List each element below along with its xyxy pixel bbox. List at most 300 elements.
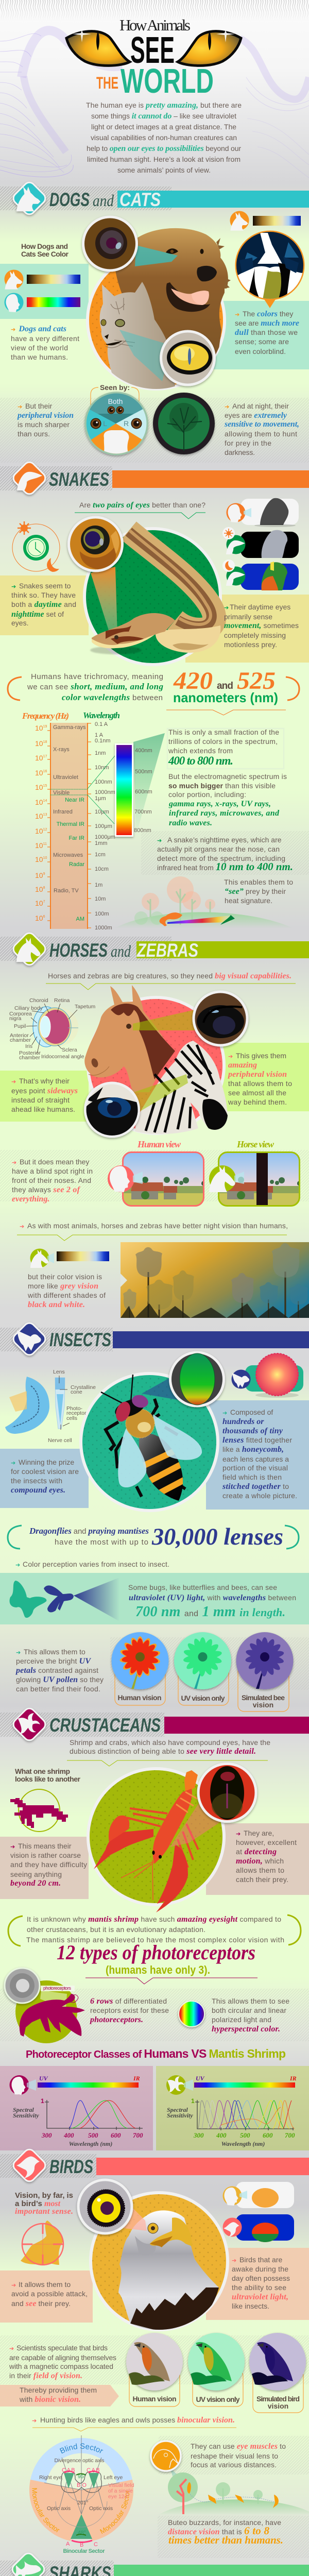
hatched strip bbox=[0, 2335, 309, 2384]
callout: 30000 lenses: Dragonflies and praying mantises bbox=[29, 1526, 149, 1536]
text: daytime eyes sense movement: Their daytime eyes bbox=[230, 603, 290, 611]
text: night vision: As with most animals, horses and zebras have better night vision than humans, bbox=[27, 1222, 288, 1230]
diagram: bird visual field: CAB bbox=[62, 2467, 76, 2473]
pictures: robin in simulated bird vision: Simulated bird bbox=[256, 2395, 300, 2403]
text: detecting motion bbox=[236, 1829, 297, 1884]
number: 420 and 525: 525 bbox=[237, 667, 276, 694]
bee bbox=[101, 1375, 202, 1501]
frequency labels: 17 bbox=[43, 755, 47, 758]
wavelength labels: 1m bbox=[95, 882, 102, 888]
text: honeycomb lenses: field which is then bbox=[222, 1473, 282, 1481]
frequency labels: 10 bbox=[35, 769, 43, 777]
column: Infrared bbox=[53, 809, 73, 815]
panel: mantis shrimp photoreceptor chart: 400 bbox=[216, 2131, 227, 2139]
text: blind spot: front of their noses. And bbox=[12, 1176, 91, 1184]
icon: dog diamond bbox=[11, 180, 47, 216]
column: Gamma-rays bbox=[53, 724, 86, 731]
text: grey vision: but their color vision is bbox=[28, 1273, 102, 1281]
number: 420 and 525: and bbox=[217, 681, 233, 691]
text: peripheral vision: peripheral vision bbox=[16, 411, 74, 420]
text: coarse vision: and they have difficulty bbox=[10, 1860, 87, 1869]
column: Microwaves bbox=[53, 852, 83, 858]
diagram: horse eye anatomy: Sclera bbox=[62, 1047, 77, 1053]
icon: lobster eye bbox=[198, 1764, 256, 1822]
text: honeycomb lenses: hundreds or bbox=[222, 1417, 264, 1426]
number: 420 and 525 bbox=[173, 667, 278, 705]
icon: bird diamond bbox=[11, 2147, 47, 2183]
visible spectrum close-up bbox=[88, 733, 165, 836]
human egg view bbox=[222, 2182, 294, 2208]
frequency labels: 6 bbox=[43, 915, 45, 919]
callout: 12 types of photoreceptors bbox=[8, 1915, 301, 1984]
diagram: ommatidium: cells bbox=[66, 1415, 77, 1421]
section banner: snakes bbox=[0, 460, 309, 496]
picture: simulated bee vision flower: vision bbox=[253, 1701, 273, 1709]
panel: snake nighttime eyes: actually pit organs near the nose, can bbox=[157, 845, 280, 853]
callout: trichromacy bbox=[8, 667, 299, 715]
section banner: insects bbox=[0, 1321, 309, 1357]
text: dogs and cats view: have a very different bbox=[11, 334, 79, 343]
diagram: horse eye anatomy: nigra bbox=[9, 1015, 22, 1022]
diagram: bird visual field: BO bbox=[77, 2482, 88, 2488]
panel: snake nighttime eyes bbox=[141, 831, 309, 875]
wavelength labels: 1mm bbox=[95, 840, 107, 846]
diagram: ommatidium: receptor bbox=[66, 1410, 87, 1416]
visible spectrum close-up: 500nm bbox=[135, 769, 152, 775]
heading: frequency: Frequency (Hz) bbox=[22, 711, 69, 721]
chart: field of view: R bbox=[124, 419, 129, 428]
diagram: bird visual field: C bbox=[94, 2541, 98, 2548]
diagram: compound eye section bbox=[5, 1377, 49, 1434]
text: peripheral vision: than ours. bbox=[18, 430, 50, 438]
picture: human view bbox=[108, 1139, 207, 1207]
frequency labels: 10 bbox=[35, 812, 43, 820]
visible spectrum close-up: 600nm bbox=[135, 789, 152, 795]
side bands bbox=[0, 1823, 309, 1899]
panel: mantis shrimp photoreceptor chart: 600 bbox=[263, 2131, 273, 2139]
text: ultraviolet light: day often possess bbox=[232, 2274, 290, 2282]
icon: shark diamond bbox=[10, 2551, 46, 2576]
icon: rabbit in crosshair bbox=[21, 2221, 63, 2265]
pictures: robin in simulated bird vision bbox=[249, 2333, 306, 2413]
text: night movement: sensitive to movement, bbox=[224, 420, 299, 429]
text: blind spot: ➔ bbox=[12, 1159, 16, 1166]
panel: uv light band bbox=[0, 1573, 309, 1624]
diagram: bird visual field: Right eye bbox=[39, 2475, 62, 2481]
diagram: ommatidium: Photo- bbox=[66, 1405, 82, 1412]
chart: field of view bbox=[83, 392, 149, 457]
text: blind spot: But it does mean they bbox=[20, 1158, 89, 1166]
text: dogs and cats view: view of the world bbox=[11, 344, 68, 352]
chart: human colour spectrum bbox=[4, 293, 80, 312]
text: visible fraction of spectrum: But the electromagnetic spectrum is bbox=[168, 772, 287, 781]
section banner: crustaceans bbox=[0, 1706, 309, 1742]
frequency labels: 10 bbox=[35, 739, 43, 748]
intro paragraph: visual capabilities of non-human creatures can bbox=[91, 133, 237, 142]
text: magnetic compass: ➔ bbox=[9, 2345, 14, 2352]
panel: snakes bbox=[0, 498, 309, 665]
question: Are two pairs of eyes better than one? bbox=[79, 501, 205, 510]
text: buzzards: times better than humans. bbox=[168, 2534, 283, 2546]
text: six rows: photoreceptors. bbox=[89, 2015, 143, 2024]
text: avoid attack: ➔ bbox=[11, 2282, 16, 2289]
text: night movement: And at night, their bbox=[232, 402, 289, 410]
text: blind spot: they always see 2 of bbox=[12, 1185, 81, 1194]
diagram: horse eye anatomy: Posterior bbox=[19, 1050, 41, 1056]
diagram: bird visual field bbox=[29, 2435, 134, 2554]
text: daytime and nighttime eyes: eyes. bbox=[11, 619, 28, 627]
text: buzzards: distance vision that is 6 to 8 bbox=[168, 2524, 270, 2537]
panel: insects bbox=[0, 1352, 309, 1711]
heading: how dogs and cats see color bbox=[21, 242, 69, 258]
text: night movement: for prey in the bbox=[225, 439, 271, 447]
text: magnetic compass: with a magnetic compass located bbox=[9, 2362, 113, 2370]
wavelength labels: 1 A bbox=[95, 732, 104, 738]
panel: human photoreceptor chart: 300 bbox=[41, 2131, 52, 2139]
heading: how dogs and cats see color: How Dogs and bbox=[21, 242, 68, 250]
side bands bbox=[0, 2248, 309, 2323]
snake circle bbox=[84, 529, 220, 665]
number: 420 and 525: 420 bbox=[173, 667, 213, 694]
diagram: horse eye anatomy: Anterior bbox=[10, 1032, 29, 1039]
section banner: birds bbox=[0, 2147, 309, 2183]
heading: photoreceptor classes: Photoreceptor Classes of Humans VS Mantis Shrimp bbox=[26, 2047, 286, 2060]
zebra bbox=[134, 1041, 228, 1134]
callout: 30000 lenses bbox=[8, 1523, 299, 1550]
frequency labels: 10 bbox=[35, 899, 43, 907]
frequency labels: 15 bbox=[43, 784, 47, 788]
heading: horses and zebras: and bbox=[111, 942, 131, 960]
text: honeycomb lenses: like a honeycomb, bbox=[222, 1445, 284, 1454]
diagram: horse eye anatomy: Corporea bbox=[9, 1011, 32, 1017]
text: visible fraction of spectrum: color portion, including: bbox=[168, 790, 246, 799]
text: visible fraction of spectrum: radio waves. bbox=[169, 819, 212, 827]
text: six rows bbox=[89, 1997, 169, 2024]
text: visible fraction of spectrum: so much bigger than this visible bbox=[168, 782, 276, 790]
text: eye muscles bbox=[191, 2442, 286, 2469]
text: blind spot: everything. bbox=[12, 1195, 49, 1204]
panel: mantis shrimp photoreceptor chart: IR bbox=[289, 2075, 297, 2082]
diagram: bird visual field: Monocular Sector bbox=[100, 2490, 130, 2534]
heading: horses and zebras: HORSES bbox=[49, 940, 108, 961]
text: colours dull: sense; some are bbox=[235, 337, 289, 346]
bracket right bbox=[286, 677, 299, 700]
hatched strip bbox=[110, 1637, 309, 1690]
bee circle bbox=[81, 1374, 218, 1511]
picture: simulated bee vision flower bbox=[236, 1632, 294, 1711]
diagram: horse eye anatomy: Retina bbox=[54, 997, 70, 1004]
visible spectrum close-up: 700nm bbox=[134, 809, 152, 815]
diagram: horse eye anatomy: Ciliary body bbox=[14, 1005, 43, 1011]
human mouse view bbox=[227, 498, 299, 527]
icon: eagle eye bbox=[78, 2180, 132, 2233]
diagram: bird visual field: Left eye bbox=[104, 2475, 123, 2481]
diagram: bird visual field: Optic axis bbox=[47, 2505, 71, 2512]
hatched strip bbox=[158, 2436, 309, 2558]
wavelength labels: 0.1 A bbox=[95, 721, 108, 727]
callout: 12 types of photoreceptors: other crustaceans, but it is an evolutionary adaptation. bbox=[27, 1925, 205, 1934]
text: colours dull: The bbox=[243, 310, 257, 318]
text: daytime eyes sense movement: movement, sometimes bbox=[224, 621, 299, 630]
frequency labels: 10 bbox=[43, 856, 47, 860]
column: Thermal IR bbox=[57, 821, 84, 827]
frequency labels: 8 bbox=[43, 886, 45, 890]
text: ultraviolet light: the ability to see bbox=[232, 2283, 286, 2292]
callout: bionic vision bbox=[0, 2385, 119, 2406]
text: dogs and cats view: Dogs and cats bbox=[19, 325, 66, 333]
text: peripheral vision: way behind them. bbox=[228, 1098, 287, 1106]
picture: horse view: Horse view bbox=[236, 1139, 274, 1149]
diagram: bird visual field: of a single bbox=[108, 2488, 133, 2494]
diagram: horse eye anatomy: chamber bbox=[19, 1055, 40, 1061]
text: magnetic compass bbox=[9, 2344, 116, 2380]
wavelength labels: 1cm bbox=[95, 852, 106, 858]
text: binocular vision bbox=[32, 2416, 236, 2431]
frequency labels: 11 bbox=[43, 842, 47, 846]
text: night movement: eyes are extremely bbox=[225, 411, 287, 420]
intro: dubious distinction of being able to see very little detail. bbox=[70, 1747, 256, 1756]
section banner: horses and zebras bbox=[0, 931, 309, 967]
heading: snakes: SNAKES bbox=[49, 469, 109, 490]
text: six rows: receptors exist for these bbox=[90, 2006, 169, 2014]
panel: mantis shrimp photoreceptor chart: UV bbox=[196, 2075, 205, 2082]
column: Far IR bbox=[68, 835, 84, 841]
text: dogs and cats view: ➔ bbox=[11, 326, 15, 333]
panel: human photoreceptor chart: UV bbox=[39, 2075, 48, 2082]
icon: zebra eye bbox=[85, 1083, 139, 1139]
diagram: horse eye anatomy: Choroid bbox=[29, 997, 48, 1004]
wavelength labels: 10m bbox=[95, 896, 106, 902]
panel: snake nighttime eyes: ➔ bbox=[157, 837, 162, 844]
cat bbox=[100, 282, 175, 392]
text: eye muscles: They can use eye muscles to bbox=[191, 2442, 286, 2451]
heading: horses and zebras: ZEBRAS bbox=[136, 940, 198, 961]
wavelength labels: 100μm bbox=[95, 823, 112, 829]
text: magnetic compass: in their field of vision. bbox=[9, 2371, 82, 2380]
column: Ultraviolet bbox=[53, 774, 78, 781]
text: uv petals: glowing UV pollen so they bbox=[16, 1675, 104, 1684]
frequency labels: 10 bbox=[35, 754, 43, 762]
diagram: ommatidium: Crystalline bbox=[71, 1384, 96, 1391]
text: peripheral vision: amazing bbox=[228, 1061, 257, 1070]
heading: wavelength: Wavelength bbox=[83, 710, 120, 720]
bracket left bbox=[8, 677, 22, 700]
text: peripheral vision: ➔ bbox=[18, 403, 22, 410]
frequency labels: 10 bbox=[35, 855, 43, 863]
text: peripheral vision: But their bbox=[25, 402, 52, 410]
text: daytime and nighttime eyes bbox=[11, 582, 76, 627]
diagram: bird visual field: Visual field bbox=[108, 2482, 134, 2488]
panel: human photoreceptor chart: Sensitivity bbox=[13, 2112, 39, 2119]
heading: vision is most important: a bird’s most bbox=[15, 2199, 61, 2208]
picture: dog view of cat bbox=[235, 231, 304, 308]
intro paragraph: some animals’ points of view. bbox=[117, 166, 211, 174]
text: peripheral vision: is much sharper bbox=[18, 420, 70, 429]
text: sideways eyes: ➔ bbox=[11, 1078, 16, 1085]
cat eyes logo bbox=[66, 30, 241, 65]
diagram: horse eye anatomy: Iris bbox=[25, 1043, 32, 1049]
illustration: snake sensing heat bbox=[114, 876, 294, 928]
text: peripheral vision: This gives them bbox=[236, 1052, 286, 1060]
text: coarse vision: ➔ bbox=[10, 1843, 15, 1850]
text: coarse vision bbox=[10, 1842, 87, 1888]
heading: horses and zebras bbox=[49, 940, 198, 961]
icon: crustacean diamond bbox=[11, 1706, 47, 1742]
text: buzzards: Buteo buzzards, for instance, have bbox=[168, 2518, 281, 2527]
text: uv wavelengths: ultraviolet (UV) light, with wavelengths between bbox=[129, 1594, 296, 1602]
callout text: Humans have trichromacy, meaning bbox=[31, 672, 163, 681]
panel: compound lens bbox=[232, 1353, 303, 1398]
eagle circle bbox=[91, 2193, 228, 2334]
snake night mouse view bbox=[222, 560, 299, 590]
text: night vision: ➔ bbox=[20, 1223, 24, 1230]
text: blind spot bbox=[12, 1158, 93, 1204]
heading: crustaceans: CRUSTACEANS bbox=[49, 1715, 161, 1736]
text: avoid attack: and see their prey. bbox=[11, 2299, 71, 2308]
picture: horse view bbox=[209, 1139, 302, 1207]
text: colour perception: ➔ bbox=[15, 1562, 20, 1568]
text: grey vision bbox=[27, 1273, 106, 1309]
diagram: horse eye anatomy: Pupil bbox=[14, 1023, 26, 1029]
column: Radio, TV bbox=[54, 888, 79, 894]
column: AM bbox=[76, 916, 84, 922]
text: visible fraction of spectrum: 400 to 800 nm. bbox=[168, 754, 233, 767]
text: colour perception: Color perception varies from insect to insect. bbox=[23, 1560, 169, 1568]
text: night movement: allowing them to hunt bbox=[225, 430, 297, 438]
text: dogs and cats view: than we humans. bbox=[11, 353, 68, 361]
visible spectrum close-up: 400nm bbox=[135, 748, 152, 754]
diagram: bird visual field: 48° bbox=[78, 2530, 86, 2536]
title word SEE: SEE bbox=[130, 30, 175, 71]
diagram: bird visual field: Blind Sector bbox=[60, 2443, 103, 2453]
frequency labels: 7 bbox=[43, 900, 45, 904]
hatched strip bbox=[0, 1150, 309, 1201]
pictures: robin in human vision bbox=[126, 2333, 183, 2406]
visible spectrum close-up: 800nm bbox=[134, 827, 151, 834]
callout: 12 types of photoreceptors: The mantis shrimp are believed to have the most complex color vision with bbox=[26, 1936, 284, 1944]
text: heat signature: heat signature. bbox=[225, 896, 272, 905]
legend: dog colour bar top bbox=[230, 211, 301, 231]
diagram: bird visual field: eye 124° bbox=[108, 2494, 130, 2500]
intro bbox=[46, 972, 296, 990]
text: daytime and nighttime eyes: both a daytime and bbox=[11, 600, 76, 609]
panel: human photoreceptor chart: Spectral bbox=[13, 2106, 34, 2113]
text: binocular vision: ➔ bbox=[32, 2417, 37, 2424]
text: uv petals: can better find their food. bbox=[16, 1685, 100, 1693]
text: peripheral vision: see almost all the bbox=[228, 1089, 286, 1097]
text: night movement: darkness. bbox=[225, 448, 255, 456]
intro: Shrimp and crabs, which also have compound eyes, have the bbox=[70, 1738, 270, 1747]
column: Near IR bbox=[65, 797, 84, 803]
frequency labels: 12 bbox=[43, 828, 47, 832]
title bbox=[66, 16, 241, 100]
horse bbox=[84, 985, 175, 1092]
diagram: horse eye anatomy: Tapetum bbox=[75, 1004, 96, 1010]
pictures: robin in simulated bird vision: vision bbox=[268, 2402, 288, 2410]
heading: dogs and cats bbox=[49, 189, 161, 210]
icon: snake diamond bbox=[11, 460, 47, 496]
text: uv wavelengths bbox=[128, 1583, 296, 1620]
text: blind spot: have a blind spot right in bbox=[12, 1167, 93, 1175]
text: ultraviolet light: ultraviolet light, bbox=[232, 2293, 288, 2301]
text: colours dull: colors they bbox=[257, 310, 293, 318]
panel: mantis shrimp photoreceptor chart: Spectral bbox=[167, 2106, 188, 2113]
text: grey vision: black and white. bbox=[28, 1300, 85, 1309]
icon: rainbow circle bbox=[179, 2001, 204, 2027]
text: honeycomb lenses bbox=[222, 1408, 297, 1500]
heading: dogs and cats: CATS bbox=[119, 189, 161, 210]
icon: day and night cycle bbox=[12, 521, 60, 572]
text: honeycomb lenses: thousands of tiny bbox=[222, 1427, 283, 1435]
beam: uv vision bbox=[74, 1578, 119, 1621]
frequency labels: 19 bbox=[43, 725, 47, 728]
panel: horses and zebras bbox=[0, 972, 309, 1350]
text: daytime eyes sense movement: primarily sense bbox=[224, 613, 272, 621]
diagram: ommatidium: Nerve cell bbox=[48, 1437, 72, 1444]
diagram: bird visual field: A bbox=[66, 2541, 70, 2547]
text: colours dull: even colorblind. bbox=[235, 347, 286, 355]
frequency labels bbox=[35, 724, 47, 922]
text: uv wavelengths: Some bugs, like butterflies and bees, can see bbox=[128, 1583, 277, 1591]
diagram: bird visual field: 201° bbox=[77, 2500, 89, 2506]
frequency labels: 14 bbox=[43, 799, 47, 803]
text: dogs and cats view bbox=[11, 325, 79, 361]
diagram: ommatidium bbox=[48, 1369, 96, 1444]
wavelength labels bbox=[95, 721, 115, 931]
panel: mantis shrimp photoreceptor chart bbox=[156, 2066, 309, 2150]
text: colours dull: see are much more bbox=[235, 319, 299, 328]
wavelength labels: 0.1nm bbox=[95, 738, 111, 744]
text: compound eyes bbox=[11, 1458, 79, 1495]
text: honeycomb lenses: Composed of bbox=[230, 1408, 273, 1416]
picture: pixelated shrimp bbox=[10, 1789, 68, 1832]
text: polarized light: hyperspectral color. bbox=[212, 2025, 280, 2033]
intro paragraph: limited human sight. Here’s a look at vision from bbox=[87, 155, 241, 163]
icon: horse eye bbox=[194, 992, 247, 1045]
text: uv petals: ➔ bbox=[16, 1649, 21, 1656]
text: honeycomb lenses: stitched together to bbox=[222, 1482, 289, 1491]
callout: 30000 lenses: have the most with up to bbox=[55, 1538, 148, 1547]
diagram: ommatidium: cone bbox=[71, 1389, 82, 1395]
heading: shrimp view: looks like to another bbox=[15, 1775, 81, 1783]
heading: insects: INSECTS bbox=[49, 1329, 111, 1350]
intro paragraph: help to open our eyes to possibilities beyond our bbox=[87, 144, 241, 153]
chart: electromagnetic spectrum bbox=[22, 710, 165, 931]
picture: tulips in horse vision bbox=[121, 1242, 309, 1318]
panel: human photoreceptor chart: 700 bbox=[133, 2131, 143, 2139]
panel: snake nighttime eyes: A snake’s nighttime eyes, which are bbox=[167, 836, 282, 844]
panel: mantis shrimp photoreceptor chart: 300 bbox=[193, 2131, 204, 2139]
text: colours dull: ➔ bbox=[235, 311, 239, 318]
text: visible fraction of spectrum: infrared rays, microwaves, and bbox=[169, 809, 280, 818]
text: compound eyes: the insects with bbox=[11, 1477, 62, 1485]
text: compound eyes: Winning the prize bbox=[19, 1458, 74, 1466]
frequency labels: 10 bbox=[35, 783, 43, 791]
text: avoid attack: avoid a possible attack, bbox=[11, 2290, 88, 2298]
frequency labels: 9 bbox=[43, 872, 45, 876]
diagram: bird visual field: Monocular Sector bbox=[32, 2488, 60, 2533]
beam: zebra vision bbox=[134, 1074, 188, 1114]
callout: bionic vision: Thereby providing them bbox=[20, 2386, 97, 2394]
picture: night tree bbox=[153, 393, 215, 454]
beam: lobster vision bbox=[170, 1803, 220, 1847]
diagram: bird visual field: Optic axis bbox=[89, 2505, 113, 2512]
text: daytime eyes sense movement: ➔ bbox=[224, 604, 229, 611]
panels: mouse views bbox=[222, 498, 299, 590]
wavelength labels: 1μm bbox=[95, 795, 106, 802]
text: honeycomb lenses: each lens captures a bbox=[222, 1455, 289, 1463]
picture: simulated bee vision flower: Simulated bee bbox=[242, 1693, 285, 1702]
